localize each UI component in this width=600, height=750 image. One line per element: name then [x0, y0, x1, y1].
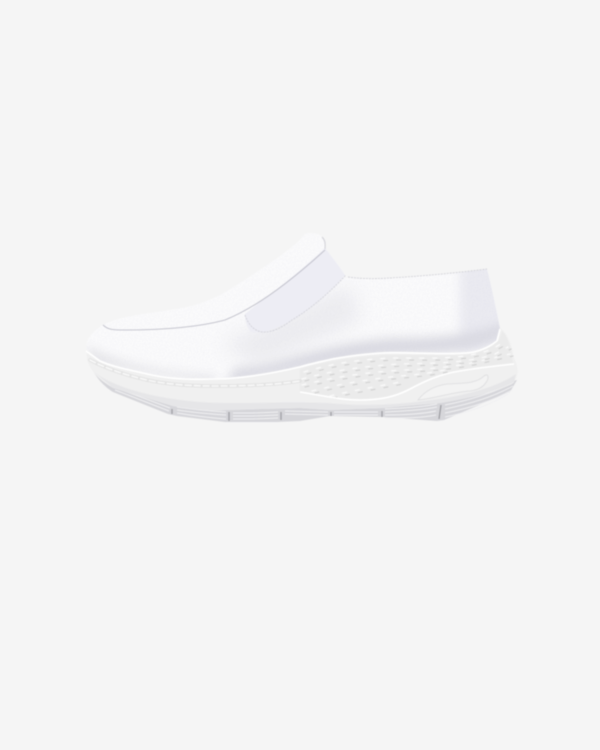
lower midsole shading — [94, 372, 516, 410]
tread gaps — [172, 405, 441, 421]
heel logo swoosh — [418, 375, 488, 400]
heel tint — [460, 270, 498, 332]
dimple dashes — [302, 341, 513, 398]
collar top seam — [348, 269, 487, 279]
dimple band — [300, 331, 513, 399]
mid vamp shadow — [237, 293, 354, 356]
tread backing — [90, 365, 517, 422]
tread ribs — [114, 382, 514, 419]
vamp panel seam — [103, 250, 325, 330]
elastic gore panel — [245, 248, 345, 332]
toe shadow — [89, 348, 212, 378]
shoe — [80, 225, 518, 422]
midsole top white rim — [86, 329, 500, 379]
gore stitch — [245, 275, 346, 332]
lower quarter shadow — [227, 326, 499, 378]
upper — [86, 233, 500, 378]
midsole lower white line — [300, 364, 514, 400]
leather grain — [80, 225, 510, 390]
outsole tread — [90, 365, 517, 422]
upper shading and grain — [88, 270, 500, 378]
collar edge highlight — [322, 237, 325, 249]
front stitch band — [90, 360, 300, 386]
midsole — [87, 328, 518, 410]
product photo: white slip-on shoe on pale grey background — [88, 236, 516, 422]
